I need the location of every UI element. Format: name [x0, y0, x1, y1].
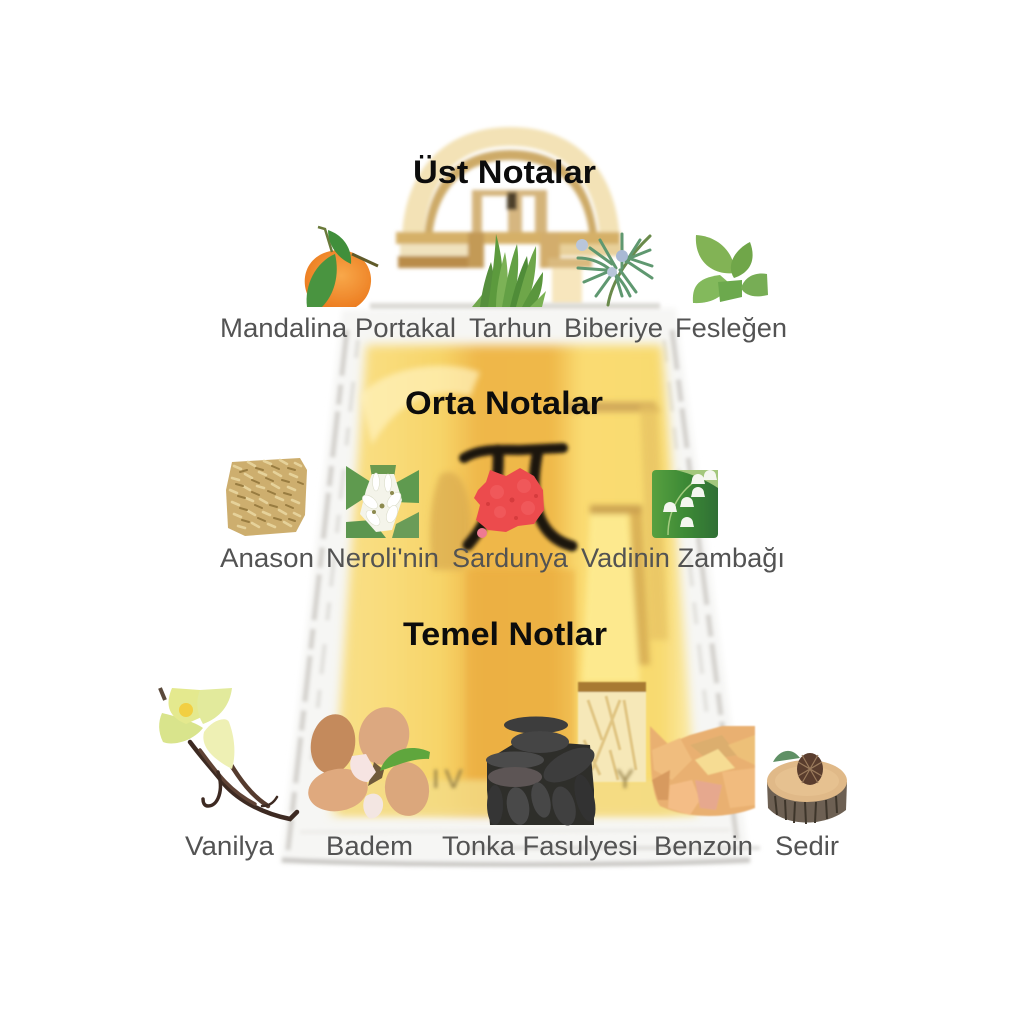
label row: top notes: Mandalina Portakal: [220, 313, 456, 343]
heading: base notes: Temel Notlar: [403, 616, 607, 652]
bottle frame: [280, 308, 750, 864]
label row: base notes: Badem: [326, 831, 413, 861]
textured panel: [578, 682, 646, 782]
label row: base notes: Tonka Fasulyesi: [442, 831, 638, 861]
label row: middle notes: [220, 543, 785, 573]
icon: tarragon: [472, 234, 546, 307]
label row: top notes: Tarhun: [469, 313, 552, 343]
bottle logo letters: IV: [432, 764, 468, 794]
icon: rosemary: [576, 234, 652, 305]
icon: anise seeds: [226, 458, 307, 536]
label row: middle notes: Vadinin Zambağı: [581, 543, 785, 573]
icon: geranium: [474, 468, 544, 538]
bottle liquid: [332, 345, 698, 815]
heading: top notes: Üst Notalar: [413, 154, 596, 190]
label row: base notes: Sedir: [775, 831, 839, 861]
icon: lily of the valley: [652, 470, 718, 538]
heading: middle notes: Orta Notalar: [405, 385, 603, 421]
label row: middle notes: Neroli'nin: [326, 543, 439, 573]
label row: base notes: [185, 831, 839, 861]
icon: almonds: [305, 702, 433, 819]
icon: tonka beans: [486, 716, 600, 828]
icon: mandarin orange: [305, 227, 378, 307]
bottle inner shading: [340, 366, 696, 815]
icon: benzoin resin: [650, 726, 755, 816]
icon: basil: [693, 235, 768, 303]
icon: vanilla: [159, 688, 297, 819]
perfume bottle background: [280, 127, 760, 864]
label row: base notes: Benzoin: [654, 831, 753, 861]
label row: top notes: Biberiye: [564, 313, 663, 343]
bottle logo letters: Y: [616, 764, 634, 794]
frame marble streaks: [282, 306, 760, 864]
icon: neroli blossom: [346, 465, 419, 538]
label row: middle notes: Anason: [220, 543, 314, 573]
pi symbol: [464, 448, 572, 546]
label row: middle notes: Sardunya: [452, 543, 568, 573]
label row: base notes: Vanilya: [185, 831, 274, 861]
label row: top notes: [220, 313, 787, 343]
label row: top notes: Fesleğen: [675, 313, 787, 343]
icon: cedar with pine cone: [767, 751, 847, 824]
bottle logo letters: [432, 764, 634, 794]
bottle cap: [396, 127, 622, 304]
